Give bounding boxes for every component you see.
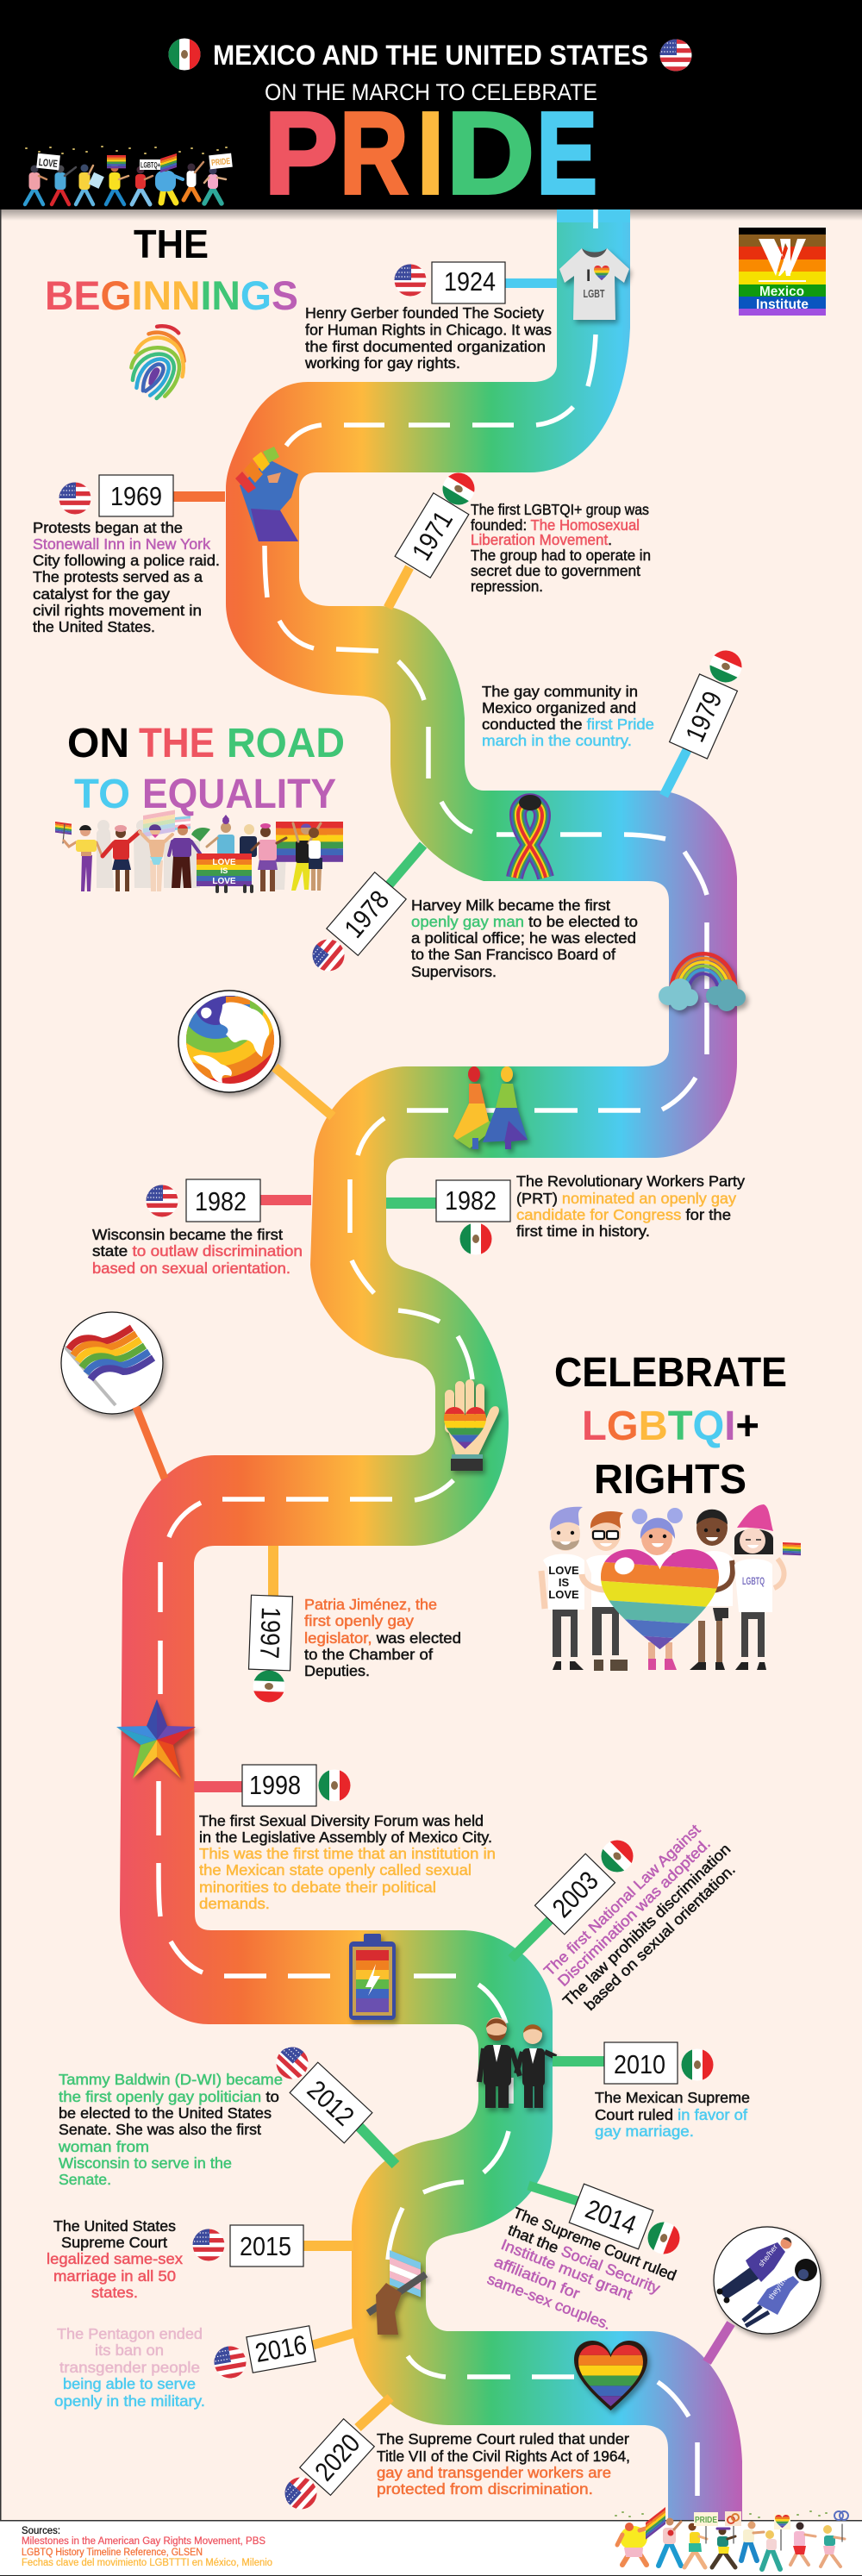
big rainbow flag (274, 822, 343, 862)
description: march in the country. (482, 732, 632, 749)
event 1982 United States (92, 1179, 311, 1277)
description: Harvey Milk became the first (411, 897, 610, 914)
sign: venus (834, 2511, 848, 2542)
description: Senate. She was also the first (59, 2121, 261, 2138)
heading: On the Road to Equality: EQUALITY (142, 772, 336, 817)
sign: Love is Love: LOVE (212, 877, 236, 886)
year box: 1978 (339, 885, 395, 944)
description: The United States (53, 2217, 176, 2235)
person: blue shirt (207, 815, 234, 855)
heading: On the Road to Equality: THE (139, 721, 215, 766)
icon: couple in circle (714, 2227, 821, 2334)
description: based on sexual orientation. (581, 1860, 739, 2014)
event 2015 (47, 2217, 353, 2301)
description: state to outlaw discrimination (92, 1242, 303, 1260)
flag: rainbow (646, 2507, 665, 2540)
description: a political office; he was elected (411, 929, 636, 947)
year box: 1924 (444, 266, 496, 297)
year box (436, 1180, 510, 1222)
description (485, 2204, 679, 2333)
description (58, 2071, 283, 2188)
sign: Love is Love (197, 853, 252, 886)
description: minorities to debate their political (199, 1879, 436, 1896)
description: its ban on (95, 2342, 164, 2359)
year box (534, 1854, 615, 1935)
description: working for gay rights. (304, 354, 460, 372)
sources: LGBTQ History Timeline Reference, GLSEN (22, 2548, 203, 2558)
figure: striped top (741, 2521, 764, 2560)
flag (681, 2048, 714, 2081)
flag (252, 1669, 286, 1704)
description: (PRT) nominated an openly gay (516, 1190, 736, 1207)
description: legalized same-sex (47, 2250, 183, 2267)
person: pink beanie: LGBTQ (742, 1575, 765, 1587)
sign: LOVE (36, 153, 60, 170)
description: The first LGBTQI+ group was (471, 501, 649, 518)
person: pink shirt (252, 823, 286, 891)
description: first openly gay (304, 1612, 414, 1629)
event 2010 (553, 2042, 750, 2140)
flag (146, 1185, 178, 1217)
description: marriage in all 50 (53, 2267, 176, 2285)
logo: Wilson Center Mexico Institute (739, 228, 826, 316)
heading: The Beginnings: THE (134, 222, 209, 266)
PRIDE wordmark: P (265, 88, 338, 218)
description (595, 2089, 750, 2140)
description: being able to serve (63, 2375, 196, 2392)
footer (0, 2507, 862, 2576)
mini rainbow flag (783, 1542, 801, 1555)
description: transgender people (59, 2359, 200, 2376)
person: black shirt (291, 823, 321, 891)
heading: On the Road to Equality: ON (67, 721, 129, 766)
description (33, 519, 220, 635)
sign: LOVE: LOVE (38, 156, 59, 170)
description (199, 1812, 496, 1912)
description: gay marriage. (595, 2123, 694, 2140)
description: The law prohibits discrimination (559, 1840, 734, 2010)
sign: PRIDE: PRIDE (211, 157, 231, 168)
icon: rainbow fingerprint (127, 322, 191, 402)
flag (318, 1769, 351, 1802)
PRIDE wordmark: E (536, 88, 597, 218)
year box: 1998 (249, 1770, 301, 1800)
description: Supreme Court (61, 2234, 167, 2251)
heading: The Beginnings: BEGINNINGS (45, 272, 298, 318)
trans flag (175, 816, 191, 830)
event 1969 (33, 475, 225, 635)
year box (99, 475, 173, 516)
year box (432, 262, 505, 303)
heading: On the Road to Equality (67, 721, 345, 817)
connector (358, 2398, 390, 2428)
sign: LGBTQ+ (140, 159, 161, 170)
event 2003 (511, 1821, 739, 2014)
confetti (615, 2511, 827, 2517)
description: Henry Gerber founded The Society (305, 304, 544, 322)
description: conducted the first Pride (482, 716, 654, 733)
PRIDE wordmark: D (447, 88, 534, 218)
flag (459, 1222, 492, 1255)
description: The Supreme Court ruled (511, 2204, 679, 2284)
flag (269, 2040, 315, 2086)
sign: PRIDE (209, 153, 233, 169)
heading: Celebrate LGBTQI+ Rights: LGBTQI+ (582, 1404, 759, 1449)
description: the United States. (33, 618, 155, 635)
person: blonde dark top (240, 824, 257, 857)
figure: blue trousers (659, 2517, 681, 2566)
connector (313, 2332, 358, 2345)
event 2020 (278, 2398, 630, 2517)
person: glasses (582, 1511, 628, 1671)
description: first time in history. (516, 1222, 650, 1240)
figure: yellow top (684, 2523, 707, 2567)
description: Court ruled in favor of (595, 2106, 747, 2123)
connector (358, 2125, 396, 2165)
event 1982 Mexico (386, 1172, 745, 1255)
description: woman from (58, 2138, 149, 2155)
year box: 1982 (195, 1186, 247, 1216)
description: Stonewall Inn in New York (33, 535, 210, 553)
event 1978 (305, 845, 638, 980)
connector (388, 567, 409, 608)
year box (186, 1179, 260, 1222)
illustration: marchers (25, 147, 233, 204)
year box: 2020 (309, 2428, 365, 2486)
connector (511, 1920, 550, 1959)
description (540, 1821, 739, 2014)
year box (327, 872, 406, 955)
year box: 1997 (254, 1606, 286, 1660)
event 1997 (249, 1546, 461, 1704)
description: gay and transgender workers are (377, 2464, 611, 2481)
description: catalyst for the gay (33, 585, 170, 603)
description: Patria Jiménez, the (304, 1596, 437, 1613)
description: secret due to government (471, 562, 640, 579)
description: the first openly gay politician to (59, 2088, 279, 2105)
figure: she/her: she/her (757, 2242, 779, 2268)
year box: 2014 (582, 2193, 640, 2241)
description: Tammy Baldwin (D-WI) became (59, 2071, 283, 2088)
description: The Pentagon ended (57, 2325, 203, 2342)
heading: On the Road to Equality: TO (74, 772, 130, 817)
connector (528, 2185, 578, 2201)
description: The Mexican Supreme (595, 2089, 750, 2106)
connector (388, 845, 423, 886)
flag (278, 2470, 324, 2517)
description: Discrimination was adopted. (554, 1835, 714, 1990)
year box: 1979 (679, 687, 728, 747)
flag (211, 2343, 249, 2381)
description (516, 1172, 745, 1240)
sign: LGBTQ+: LGBTQ+ (141, 160, 160, 169)
heading: Celebrate LGBTQI+ Rights (554, 1350, 787, 1503)
icon: LGBT t-shirt: LGBT (583, 287, 605, 300)
flag (594, 1833, 640, 1879)
flag: United States (659, 39, 692, 72)
figure: pink top (790, 2523, 815, 2565)
flag: rainbow two (160, 153, 177, 172)
year box (569, 2184, 653, 2249)
connector (553, 2056, 604, 2066)
description: City following a police raid. (33, 552, 220, 569)
illustration: crowd with flags (55, 810, 343, 891)
illustration: grooms (479, 2017, 556, 2108)
year box (242, 1765, 316, 1806)
description: protected from discrimination. (377, 2480, 593, 2498)
event 2014 (485, 2184, 685, 2333)
connector: couple to road (707, 2323, 731, 2362)
description: to the Chamber of (304, 1646, 433, 1663)
sign: PRIDE: PRIDE (695, 2516, 717, 2525)
icon: rainbow flag in circle (61, 1312, 163, 1414)
description: states. (91, 2284, 138, 2301)
person: lavender hair: LOVE (548, 1588, 579, 1601)
figure: they/them: they/them (766, 2268, 793, 2301)
icon: hand with transgender flag (368, 2250, 426, 2335)
year box: 2015 (240, 2231, 291, 2261)
description: Wisconsin to serve in the (59, 2154, 232, 2172)
illustration: marchers bottom (615, 2507, 848, 2569)
icon: pride ribbon (515, 795, 546, 878)
description: Liberation Movement. (471, 531, 612, 548)
sign: symbols (725, 2511, 741, 2543)
description: that the Social Security (506, 2221, 663, 2297)
description: demands. (199, 1895, 270, 1912)
icon: rainbow globe (178, 990, 286, 1100)
connector (386, 1197, 436, 1209)
event 2012 (58, 2040, 396, 2188)
header band (0, 0, 862, 228)
description (377, 2430, 630, 2498)
pastel flag (143, 810, 175, 837)
description: Supervisors. (411, 963, 497, 980)
year box: 1971 (406, 506, 459, 566)
logo: Wilson Center Mexico Institute: Mexico (759, 284, 804, 299)
connector (268, 1546, 278, 1596)
person: purple shirt (169, 824, 200, 888)
icon: hand holding rainbow heart (444, 1379, 499, 1471)
year box (395, 493, 469, 578)
description: repression. (471, 578, 543, 595)
icon: battery (349, 1934, 396, 2020)
person: bare torso (140, 824, 172, 891)
description (47, 2217, 183, 2301)
icon: rainbow heart badge (574, 2341, 647, 2410)
connector: globe to road (275, 1067, 333, 1116)
person: lavender hair: LOVE (548, 1564, 579, 1577)
year box: 1969 (110, 481, 162, 511)
connector (664, 750, 687, 796)
flag (305, 932, 352, 979)
description: Senate. (59, 2171, 111, 2188)
sign: Love is Love: IS (221, 866, 228, 875)
connector (505, 278, 557, 288)
event 2016 (54, 2325, 358, 2410)
figure: blonde (762, 2530, 780, 2569)
year box (249, 1595, 292, 1671)
icon: rainbow with clouds (659, 953, 746, 1011)
description: founded: The Homosexual (471, 516, 640, 534)
description: the Mexican state openly called sexual (199, 1861, 472, 1879)
sources (22, 2526, 272, 2568)
description: same-sex couples. (485, 2270, 614, 2333)
description: civil rights movement in (33, 602, 202, 619)
heading: Celebrate LGBTQI+ Rights: CELEBRATE (554, 1350, 787, 1396)
year box: 2003 (547, 1866, 604, 1923)
description (471, 501, 651, 595)
icon: LGBT t-shirt: I (586, 267, 590, 285)
road (120, 209, 742, 2521)
description: Title VII of the Civil Rights Act of 1964, (377, 2448, 630, 2465)
sources: Milestones in the American Gay Rights Movement, PBS (22, 2536, 265, 2547)
figure: teal top (821, 2525, 845, 2567)
title line two: ON THE MARCH TO CELEBRATE (265, 79, 597, 105)
year box: 1982 (445, 1185, 497, 1216)
description: Wisconsin became the first (92, 1226, 283, 1243)
description: openly gay man to be elected to (411, 913, 638, 930)
event 1979 (482, 645, 747, 796)
description: to the San Francisco Board of (411, 946, 615, 963)
figure: dark purple hat (712, 2528, 735, 2567)
small rainbow flag (55, 822, 72, 835)
description: The Revolutionary Workers Party (516, 1172, 745, 1190)
person: lavender hair (541, 1507, 584, 1670)
sign: blue placard (89, 172, 104, 189)
connector (303, 2241, 353, 2251)
description: Protests began at the (33, 519, 183, 536)
person: yellow top (64, 825, 102, 891)
description: be elected to the United States (59, 2104, 272, 2122)
description: The first Sexual Diversity Forum was held (199, 1812, 484, 1829)
flag (704, 645, 747, 688)
connector (194, 1781, 243, 1792)
heading: On the Road to Equality: ROAD (227, 721, 345, 766)
person: red shirt (103, 825, 140, 891)
illustration: five friends with rainbow heart (541, 1504, 801, 1676)
description (304, 304, 552, 372)
person: lavender hair: IS (559, 1576, 569, 1589)
year box (290, 2062, 372, 2143)
description (54, 2325, 205, 2410)
description: candidate for Congress for the (516, 1206, 731, 1223)
sources: Fechas clave del movimiento LGBTTTI en México, Milenio (22, 2558, 272, 2568)
description: The first National Law Against (540, 1821, 703, 1979)
sources: Sources: (22, 2526, 60, 2536)
title line one: MEXICO AND THE UNITED STATES (213, 40, 648, 71)
description: for Human Rights in Chicago. It was (305, 321, 552, 338)
description: The protests served as a (33, 568, 203, 585)
icon: rainbow star (116, 1699, 196, 1779)
icon: LGBT t-shirt (559, 248, 629, 320)
person: pastel buns (632, 1508, 683, 1670)
ghost crowd (97, 820, 286, 890)
year box: 2012 (302, 2074, 360, 2132)
flag: Mexico (168, 38, 201, 71)
description: in the Legislative Assembly of Mexico City. (199, 1829, 492, 1846)
PRIDE wordmark: I (417, 88, 444, 218)
description: The gay community in (482, 683, 638, 700)
icon: couple silhouette (453, 1066, 528, 1149)
heading: Celebrate LGBTQI+ Rights: RIGHTS (594, 1457, 746, 1503)
description: affiliation for (492, 2253, 583, 2303)
description: The group had to operate in (471, 547, 651, 564)
connector (173, 491, 225, 502)
description (92, 1226, 303, 1277)
sign: heart (774, 2514, 790, 2550)
big rainbow heart (601, 1549, 719, 1649)
description (304, 1596, 461, 1679)
description: Institute must grant (499, 2235, 635, 2304)
event 1971 (388, 466, 651, 608)
year box (604, 2042, 678, 2084)
PRIDE wordmark: R (340, 88, 409, 218)
sign: Love is Love: LOVE (212, 858, 236, 867)
event 1924 (304, 262, 557, 372)
description: Deputies. (304, 1662, 370, 1679)
heading: The Beginnings (45, 222, 298, 318)
PRIDE wordmark (265, 88, 597, 218)
description: The Supreme Court ruled that under (377, 2430, 629, 2448)
flag (436, 466, 481, 511)
figure: yellow (617, 2523, 648, 2565)
description: openly in the military. (54, 2392, 205, 2410)
fan (191, 828, 210, 841)
year box: 2010 (614, 2049, 665, 2079)
event 1998 (194, 1765, 496, 1912)
description (411, 897, 638, 980)
description: legislator, was elected (304, 1629, 461, 1647)
logo: Wilson Center Mexico Institute: Institute (756, 297, 809, 312)
flag (642, 2216, 685, 2260)
left edge rule (0, 209, 2, 2576)
sign: PRIDE (694, 2512, 718, 2543)
description (482, 683, 654, 749)
year box: 2016 (253, 2329, 309, 2368)
icon: raised fist (235, 447, 298, 541)
description: This was the first time that an institution in (199, 1845, 496, 1862)
year box (230, 2225, 303, 2267)
description: the first documented organization (305, 338, 546, 355)
description: Mexico organized and (482, 699, 636, 716)
flag (59, 482, 91, 515)
description: based on sexual orientation. (92, 1260, 290, 1277)
person: pink beanie (734, 1504, 784, 1670)
connector (260, 1195, 311, 1205)
flag (394, 264, 427, 297)
person: dark skin (671, 1510, 733, 1670)
connector: flag to road (136, 1407, 165, 1479)
flag (192, 2229, 225, 2261)
year box (670, 674, 737, 759)
feet under sign (217, 886, 252, 891)
person: white top (309, 828, 322, 891)
flag: rainbow (107, 155, 126, 168)
